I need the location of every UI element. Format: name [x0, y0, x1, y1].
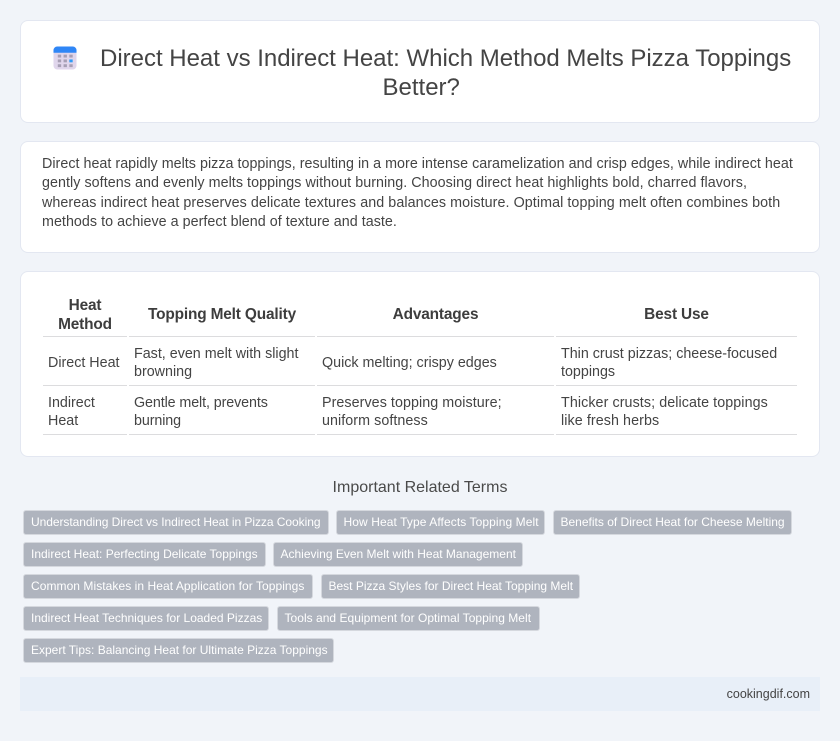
tag — [272, 542, 523, 567]
cell: indirect melt quality: burning — [134, 413, 181, 429]
cell: indirect best use — [561, 395, 768, 429]
row: Indirect Heat: Indirect — [48, 395, 95, 411]
row: Direct Heat: Direct Heat — [48, 355, 120, 371]
footer source: cookingdif.com — [727, 687, 810, 701]
header: Heat Method: Heat — [69, 297, 101, 314]
intro text: Direct heat rapidly melts pizza toppings, resulting in a more intense caramelization and crisp edges, while indirect heat — [42, 156, 793, 172]
cell: direct best use — [561, 346, 777, 380]
tag — [276, 606, 540, 631]
cell: indirect advantages — [322, 395, 502, 429]
header: Best Use: Best Use — [644, 306, 709, 323]
panel: intro text — [20, 141, 820, 253]
cell: indirect advantages: Preserves topping moisture; — [322, 395, 502, 411]
tag — [23, 638, 334, 663]
tag: Common Mistakes in Heat Application for Toppings — [31, 579, 304, 593]
tag — [23, 510, 328, 535]
tag list — [23, 510, 792, 663]
cell: indirect best use: Thicker crusts; delicate toppings — [561, 395, 768, 411]
tag: Benefits of Direct Heat for Cheese Melting — [560, 515, 785, 529]
row: Indirect Heat — [48, 395, 95, 429]
panel: comparison table — [20, 271, 820, 457]
footer bar — [20, 677, 820, 711]
tag: How Heat Type Affects Topping Melt — [344, 515, 539, 529]
header: Heat Method — [58, 297, 112, 332]
tag: Expert Tips: Balancing Heat for Ultimate Pizza Toppings — [31, 643, 328, 657]
tag: Understanding Direct vs Indirect Heat in Pizza Cooking — [31, 515, 320, 529]
cell: direct melt quality — [134, 346, 298, 380]
intro text — [42, 156, 793, 230]
heading: related terms: Important Related Terms — [333, 479, 507, 496]
cell: indirect melt quality — [134, 395, 268, 429]
tag — [552, 510, 792, 535]
row: Indirect Heat: Heat — [48, 413, 78, 429]
cell: direct best use: toppings — [561, 364, 615, 380]
tag: Best Pizza Styles for Direct Heat Topping Melt — [328, 579, 573, 593]
intro text: methods to achieve a perfect blend of texture and taste. — [42, 214, 397, 230]
tag — [23, 542, 266, 567]
header: Advantages: Advantages — [393, 306, 478, 323]
intro text: gently softens and evenly melts toppings without burning. Choosing direct heat highlights bold, charred flavors, — [42, 175, 747, 191]
title: Direct Heat vs Indirect Heat: Which Method Melts Pizza Toppings — [100, 45, 791, 72]
cell: indirect advantages: uniform softness — [322, 413, 428, 429]
cell: indirect melt quality: Gentle melt, prevents — [134, 395, 268, 411]
panel: title card — [20, 20, 820, 123]
tag: Tools and Equipment for Optimal Topping Melt — [284, 611, 531, 625]
cell: indirect best use: like fresh herbs — [561, 413, 659, 429]
header: Heat Method: Method — [58, 316, 112, 332]
cell: direct best use: Thin crust pizzas; cheese-focused — [561, 346, 777, 362]
header: Topping Melt Quality: Topping Melt Quality — [148, 306, 296, 323]
tag: Indirect Heat Techniques for Loaded Pizzas — [31, 611, 262, 625]
title — [100, 45, 791, 101]
cell: direct melt quality: browning — [134, 364, 192, 380]
comparison table — [43, 297, 797, 435]
tag: Indirect Heat: Perfecting Delicate Toppings — [31, 547, 258, 561]
tag — [320, 574, 580, 599]
tag: Achieving Even Melt with Heat Management — [280, 547, 516, 561]
icon: calendar — [53, 46, 77, 70]
cell: direct melt quality: Fast, even melt with slight — [134, 346, 298, 362]
cell: direct advantages: Quick melting; crispy edges — [322, 355, 497, 371]
title: Better? — [382, 74, 460, 101]
intro text: whereas indirect heat preserves delicate textures and balances moisture. Optimal topping melt often combines both — [42, 195, 780, 211]
tag — [23, 574, 313, 599]
tag — [336, 510, 545, 535]
tag — [23, 606, 269, 631]
